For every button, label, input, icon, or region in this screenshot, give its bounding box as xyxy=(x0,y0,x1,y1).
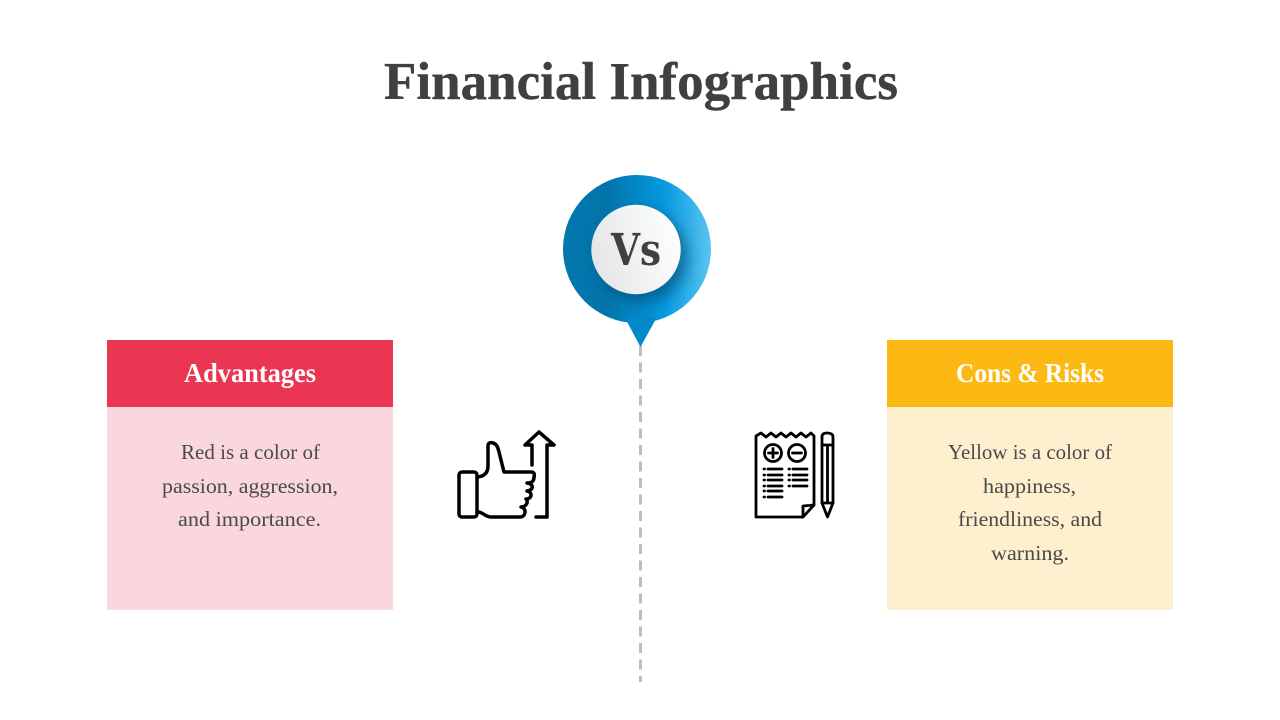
panel: cons and risks xyxy=(887,340,1173,610)
advantages heading: Advantages xyxy=(184,358,316,388)
cons text: warning. xyxy=(991,541,1069,565)
disc shadow xyxy=(598,212,688,302)
Vs label: Vs xyxy=(610,225,661,276)
cons body xyxy=(887,407,1173,610)
advantages text xyxy=(162,440,338,531)
panel: advantages xyxy=(107,340,393,610)
icon: pros and cons receipt with pencil xyxy=(756,433,833,517)
advantages text: and importance. xyxy=(178,507,321,531)
icon: thumbs up with arrow xyxy=(459,432,554,517)
advantages text: Red is a color of xyxy=(181,440,320,464)
advantages text: passion, aggression, xyxy=(162,474,338,498)
advantages header xyxy=(107,340,393,407)
cons text: happiness, xyxy=(983,474,1076,498)
cons text: Yellow is a color of xyxy=(948,440,1112,464)
pin badge: Vs xyxy=(563,175,711,347)
cons text: friendliness, and xyxy=(958,507,1103,531)
cons text xyxy=(948,440,1112,565)
pin body xyxy=(563,175,711,323)
white disc xyxy=(591,205,681,294)
cons header xyxy=(887,340,1173,407)
title: Financial Infographics xyxy=(384,53,898,111)
dashed timeline xyxy=(639,346,642,682)
advantages body xyxy=(107,407,393,610)
cons heading: Cons & Risks xyxy=(956,358,1104,388)
pin pointer xyxy=(625,317,657,347)
